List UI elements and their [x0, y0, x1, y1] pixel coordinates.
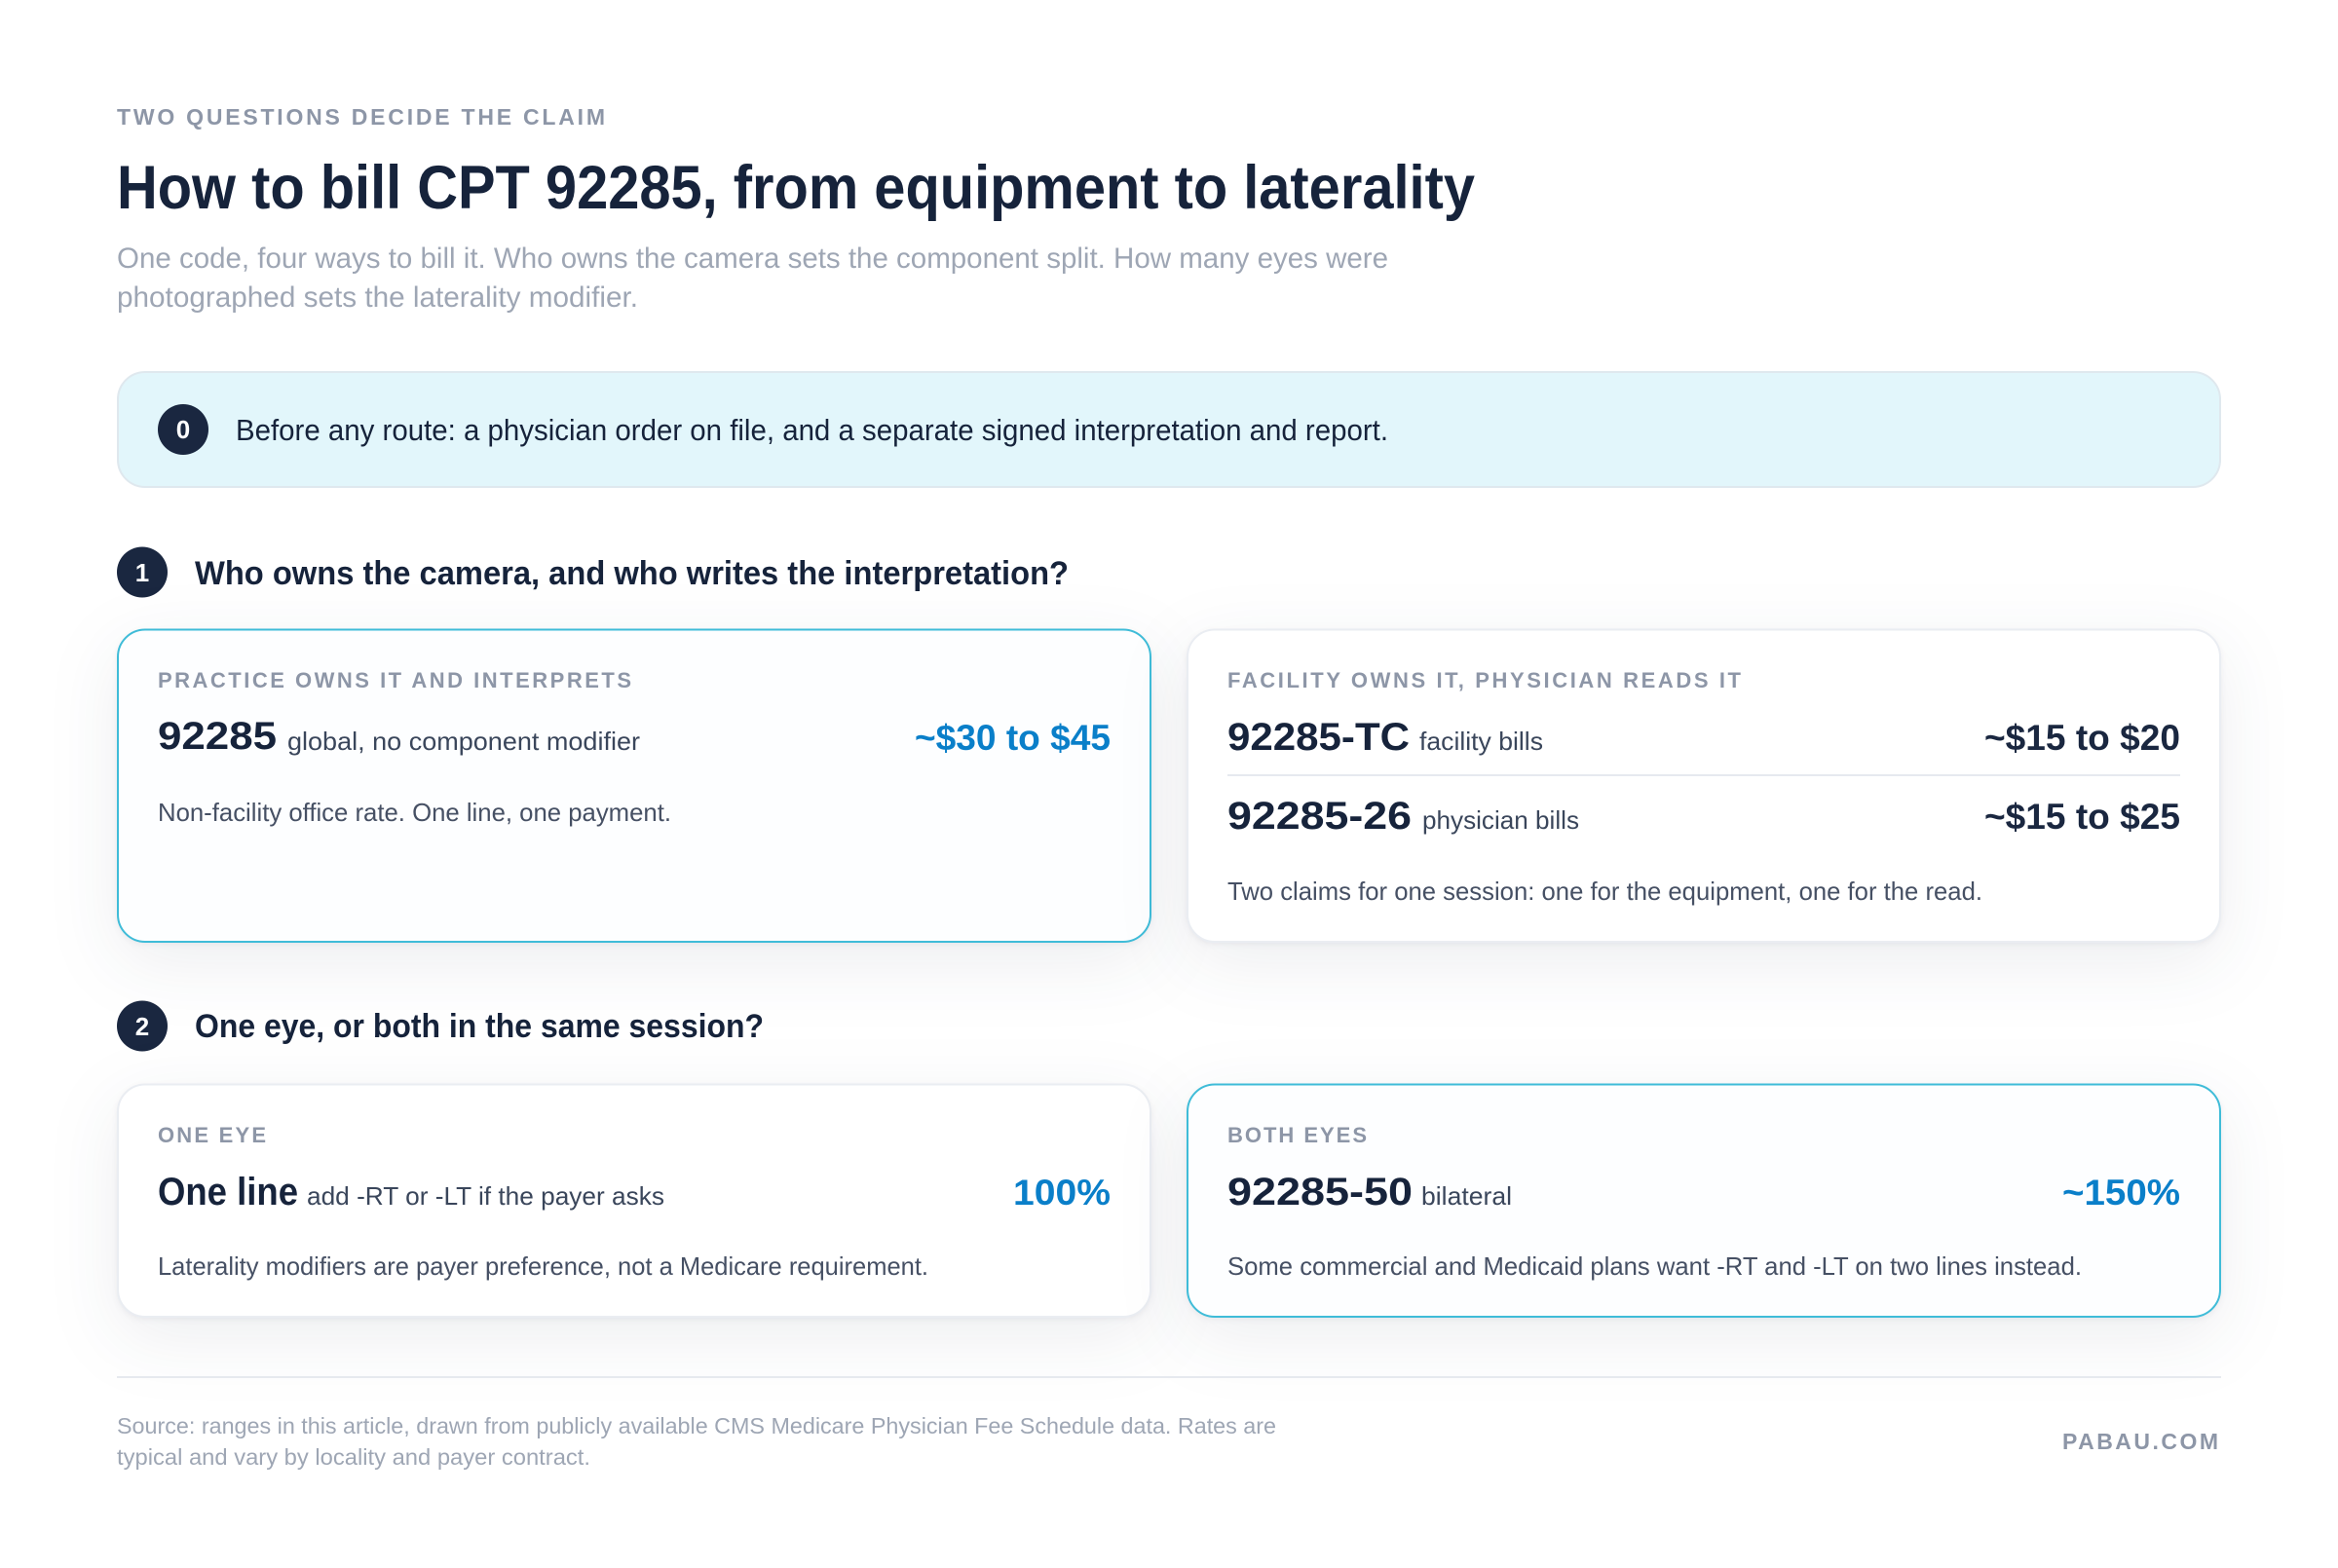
source note	[117, 1413, 1276, 1470]
code line	[1227, 1171, 1512, 1213]
step 1 heading: Who owns the camera, and who writes the interpretation?	[195, 555, 1069, 592]
step 2 heading: 2	[135, 1012, 149, 1041]
price: 100%	[1013, 1173, 1111, 1213]
price: ~$30 to $45	[915, 718, 1111, 758]
code line 26	[1227, 795, 1579, 838]
source note: typical and vary by locality and payer contract.	[117, 1444, 590, 1470]
panel: prerequisite banner	[118, 372, 2220, 487]
code line 26: 92285-26	[1227, 795, 1412, 838]
panel: facility owns it	[1188, 629, 2220, 942]
card label: PRACTICE OWNS IT AND INTERPRETS	[158, 668, 631, 692]
card label: FACILITY OWNS IT, PHYSICIAN READS IT	[1227, 668, 1742, 692]
code line: 92285-50	[1227, 1171, 1413, 1213]
description: Some commercial and Medicaid plans want -RT and -LT on two lines instead.	[1227, 1251, 2082, 1281]
subtitle: One code, four ways to bill it. Who owns the camera sets the component split. How many eyes were	[117, 243, 1388, 275]
code line 26: physician bills	[1422, 805, 1579, 835]
code line TC	[1227, 716, 1543, 759]
card label: ONE EYE	[158, 1123, 266, 1147]
description: Laterality modifiers are payer preference, not a Medicare requirement.	[158, 1251, 928, 1281]
price 26: ~$15 to $25	[1984, 797, 2180, 837]
code line TC: 92285-TC	[1227, 716, 1410, 759]
price TC: ~$15 to $20	[1984, 718, 2180, 758]
code line: One line	[158, 1171, 298, 1213]
card label: BOTH EYES	[1227, 1123, 1367, 1147]
subtitle: photographed sets the laterality modifier.	[117, 281, 638, 314]
panel: one eye	[118, 1085, 1150, 1317]
code line	[158, 715, 640, 758]
code line: global, no component modifier	[287, 727, 640, 756]
code line: bilateral	[1421, 1181, 1512, 1211]
step 1 heading	[117, 547, 1069, 598]
step 1 heading: 1	[135, 558, 149, 587]
title: How to bill CPT 92285, from equipment to laterality	[117, 154, 1475, 222]
panel: both eyes	[1188, 1085, 2220, 1317]
step badge 0	[158, 404, 208, 455]
code line: add -RT or -LT if the payer asks	[307, 1181, 664, 1211]
code line: 92285	[158, 715, 277, 758]
source note: Source: ranges in this article, drawn from publicly available CMS Medicare Physician Fee Schedule data. Rates are	[117, 1413, 1276, 1438]
step 2 heading	[117, 1001, 764, 1052]
subtitle	[117, 243, 1388, 314]
brand: PABAU.COM	[2062, 1429, 2218, 1454]
prerequisite text: Before any route: a physician order on file, and a separate signed interpretation and report.	[236, 413, 1388, 447]
price: ~150%	[2062, 1173, 2180, 1213]
description: Non-facility office rate. One line, one payment.	[158, 798, 671, 827]
code line	[158, 1171, 664, 1213]
eyebrow: TWO QUESTIONS DECIDE THE CLAIM	[117, 104, 605, 130]
step 2 heading: One eye, or both in the same session?	[195, 1008, 764, 1045]
description: Two claims for one session: one for the equipment, one for the read.	[1227, 877, 1982, 906]
code line TC: facility bills	[1419, 727, 1543, 756]
step badge 0: 0	[176, 415, 190, 444]
panel: practice owns it	[118, 629, 1150, 942]
